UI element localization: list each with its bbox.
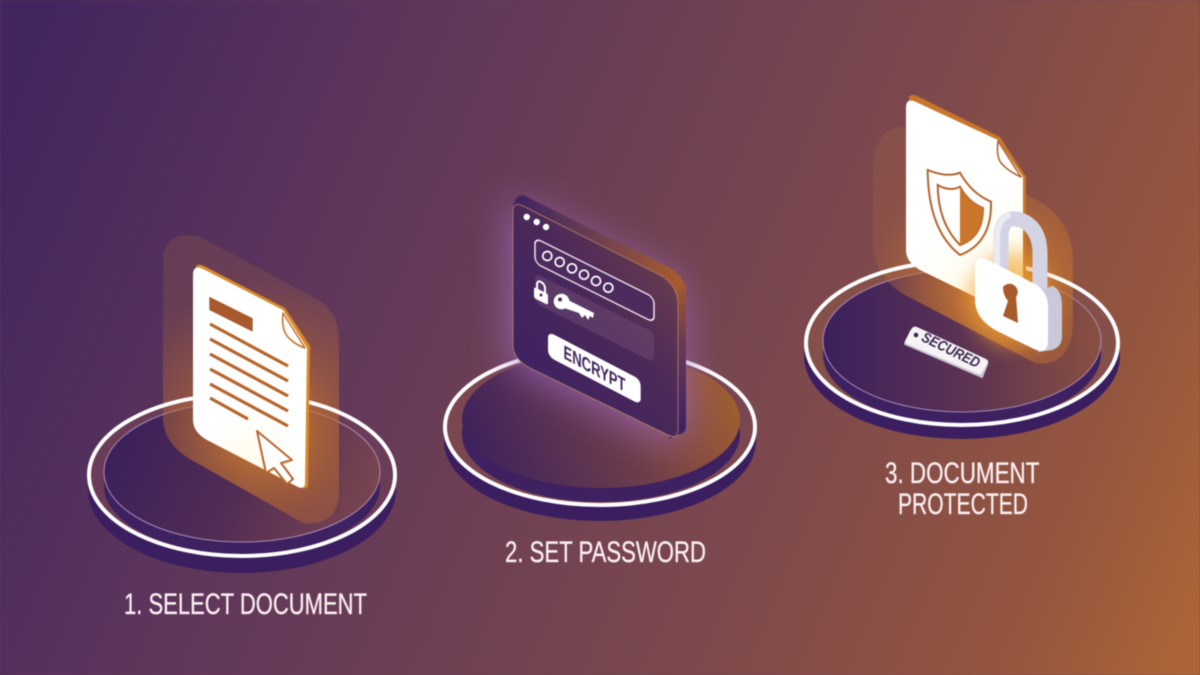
glow panel behind document: [163, 235, 339, 523]
label 1: 1. SELECT DOCUMENT: [124, 588, 367, 621]
platform 1: [88, 394, 396, 573]
label 3: 3. DOCUMENT: [885, 457, 1039, 490]
login window: [513, 195, 686, 439]
orange glow around lock: [968, 252, 1052, 348]
document icon: [193, 265, 310, 488]
step 3: document protected: [804, 95, 1120, 521]
window side: [668, 284, 686, 439]
step 1: select document: [88, 235, 396, 621]
platform ring 1: [89, 394, 395, 556]
padlock: [975, 214, 1062, 352]
glow panel behind document and lock: [873, 127, 1073, 364]
label 2: 2. SET PASSWORD: [505, 536, 706, 569]
platform 2: [444, 349, 756, 521]
label 3: PROTECTED: [898, 488, 1028, 521]
platform 3: [804, 261, 1120, 439]
window face: [513, 204, 678, 437]
secured tag: SECURED: [919, 330, 983, 372]
keyhole: [1003, 284, 1018, 323]
encrypt button: [548, 332, 641, 405]
password field: [535, 238, 654, 322]
lock body: [975, 258, 1048, 351]
purple glow behind window: [511, 200, 688, 441]
encrypt button: ENCRYPT: [564, 342, 626, 397]
protected document: [906, 95, 1026, 320]
shield icon: [928, 170, 991, 255]
page fold: [998, 141, 1021, 177]
key icon: [554, 294, 594, 320]
platform ring 3: [806, 261, 1118, 425]
step 2: set password: [444, 195, 756, 569]
small lock icon: [534, 281, 548, 304]
window dots: [524, 214, 549, 230]
second input field: [535, 273, 654, 362]
platform ring 2: [445, 349, 755, 505]
window top edge: [513, 195, 686, 300]
page fold: [283, 313, 305, 348]
cursor arrow: [257, 431, 293, 484]
lock side: [1038, 286, 1062, 352]
shackle: [1001, 219, 1040, 290]
header block: [209, 297, 253, 332]
text lines: [210, 324, 288, 426]
